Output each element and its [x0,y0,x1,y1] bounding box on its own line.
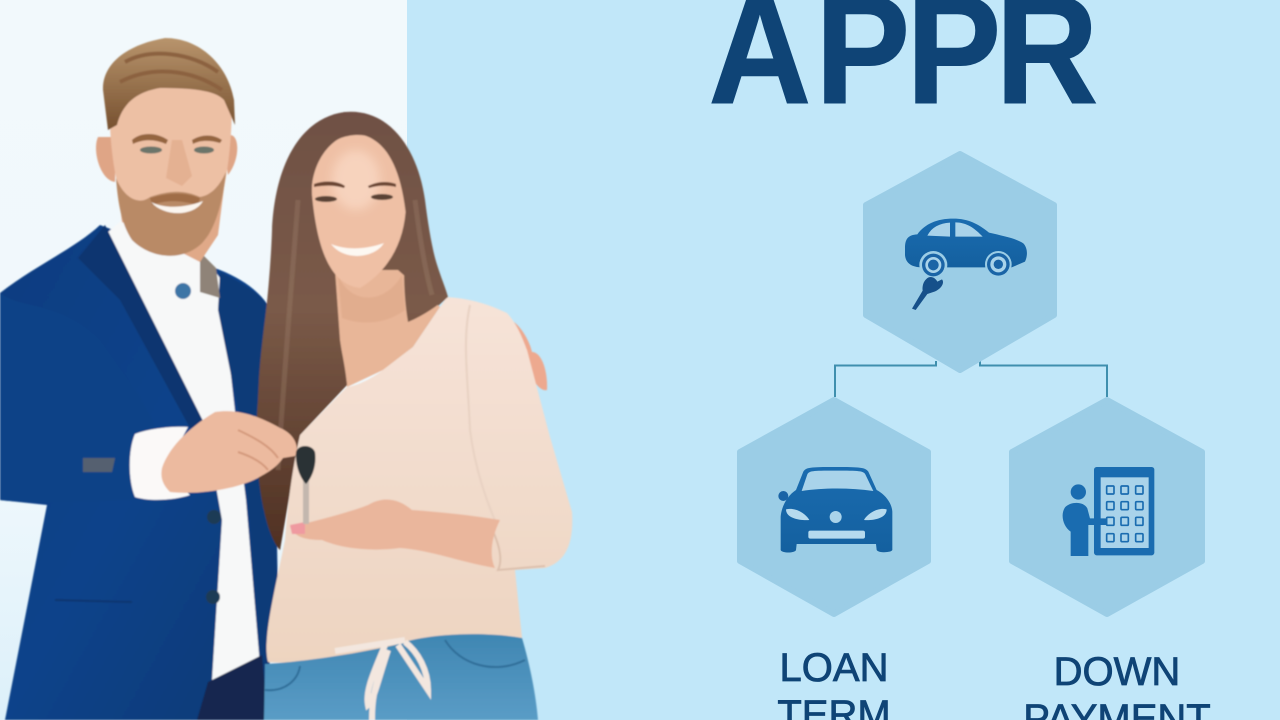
woman: hair strands [278,200,432,470]
man: beard [116,172,226,256]
woman: eyes and brows [314,182,396,202]
woman: smile [331,243,384,256]
icon: front view car [778,467,892,552]
man: jacket buttons [207,510,221,524]
hexagon: car and key [866,154,1054,370]
label: loan term [777,646,891,720]
woman: face [312,135,406,288]
man: shirt cuff [130,427,190,500]
icon: car and key [905,219,1027,310]
label: loan term: LOAN [780,646,888,690]
man: collar shadow [200,252,220,298]
woman: forearm and hand [290,500,500,568]
man: shirt button [175,283,191,299]
man: neck [118,180,225,262]
man: smile [151,201,203,213]
woman: hair back [257,112,448,550]
man: sleeve [0,293,155,502]
woman: hair front [258,112,448,550]
hexagon: loan term [740,400,928,614]
man: jacket [0,225,278,720]
man: face [110,77,232,252]
photo: couple with car key [0,38,572,720]
label: down payment: DOWN [1054,650,1180,694]
woman: jeans [264,634,538,720]
woman: sleeve seam [466,305,497,525]
man: trousers [197,655,268,720]
man: hand [161,411,297,493]
hexagon: down payment [1012,400,1202,614]
man: eyes and brows [132,134,222,154]
woman: sleeve shade [490,525,545,570]
background: left panel [0,0,407,720]
woman: jeans waist tie [335,640,428,720]
man: ears [96,135,237,182]
man: hair [103,38,235,130]
background: right panel [407,0,1280,720]
car key [296,446,315,524]
man: pocket line [55,600,132,602]
woman: face shade [332,150,380,210]
woman's hand on shoulder [514,322,547,390]
woman: jeans pocket lines [265,640,525,690]
man: lapel shade [78,225,205,428]
man: nose shade [166,140,192,186]
icon: person at calculator [1063,467,1154,556]
label: down payment [1023,650,1211,720]
connector lines [835,361,1107,397]
woman: sweater [266,297,572,663]
man: sleeve buttons [83,458,115,472]
woman: neck and chest [335,270,440,387]
man: shirt [108,220,260,680]
